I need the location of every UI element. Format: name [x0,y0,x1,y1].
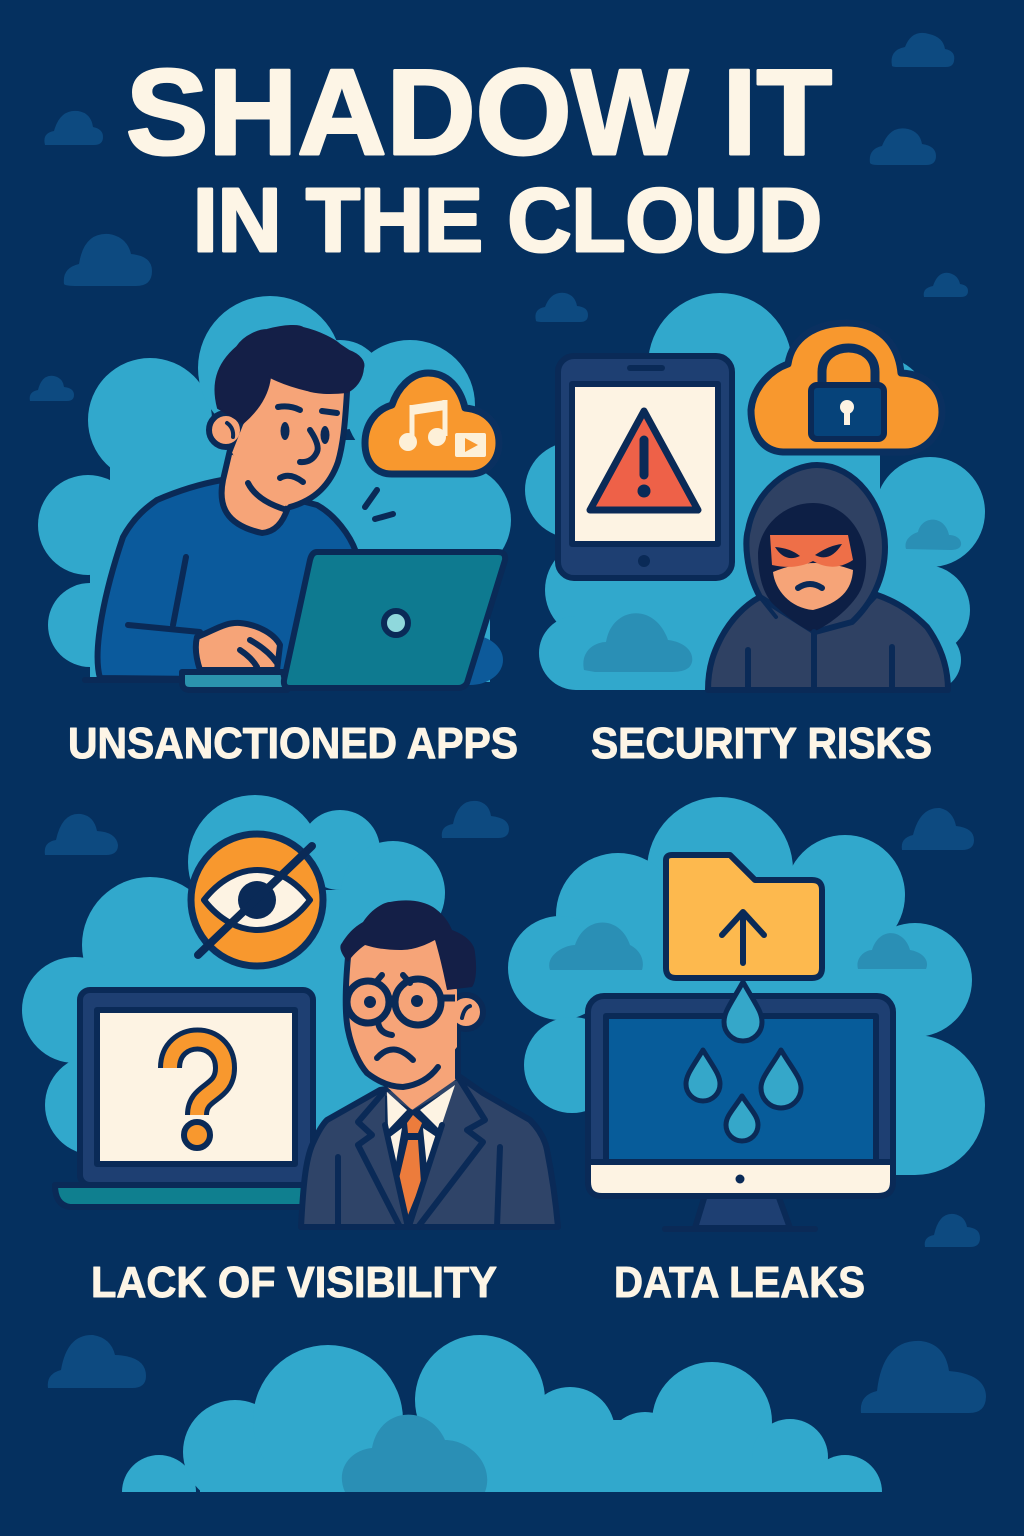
facial features [376,975,413,1060]
small cloud left [549,922,643,970]
panel: unsanctioned apps [38,296,511,690]
icon: warning triangle [590,411,698,510]
small cloud right [906,520,961,550]
big cloud background [22,795,445,1180]
hooded figure [708,465,948,690]
title: IN THE CLOUD [193,171,822,271]
hand [196,623,280,670]
panel: lack of visibility [22,795,558,1227]
label: unsanctioned apps: UNSANCTIONED APPS [68,719,518,768]
collar [387,1085,455,1168]
label: security risks: SECURITY RISKS [591,719,932,768]
person [85,326,363,680]
shirt dark [385,1095,442,1223]
ear [449,995,483,1029]
tablet [558,356,732,578]
face [232,377,347,506]
icon: folder upload [666,855,822,978]
question mark [170,1040,225,1115]
head [346,935,457,1087]
tie [398,1115,422,1215]
blob behind laptop [437,635,503,685]
neck [222,450,300,533]
water drops [686,982,801,1141]
laptop [182,552,505,690]
hair [340,900,476,990]
sweater [98,480,356,680]
big cloud background [38,296,511,682]
label: lack of visibility: LACK OF VISIBILITY [91,1258,497,1307]
suit [301,1077,558,1227]
facial features [278,406,337,482]
monitor [588,982,893,1229]
manager figure [301,900,558,1227]
title: SHADOW IT [126,44,832,180]
ear [209,413,243,447]
panel: security risks [525,293,985,691]
laptop [55,990,320,1207]
glasses [347,979,455,1025]
bottom cloud [122,1335,882,1492]
lapels [338,1080,500,1227]
surprise marks [365,490,393,519]
small cloud [583,613,692,672]
icon: media cloud [365,373,499,474]
title [126,44,832,271]
small cloud right [857,933,927,969]
icon: crossed eye [191,834,323,966]
panel: data leaks [508,797,985,1229]
hair [215,326,363,423]
big cloud background [525,293,985,691]
big cloud background [508,797,985,1175]
neck [385,1030,458,1110]
icon: cloud lock [751,323,942,452]
label: data leaks: DATA LEAKS [614,1258,865,1307]
